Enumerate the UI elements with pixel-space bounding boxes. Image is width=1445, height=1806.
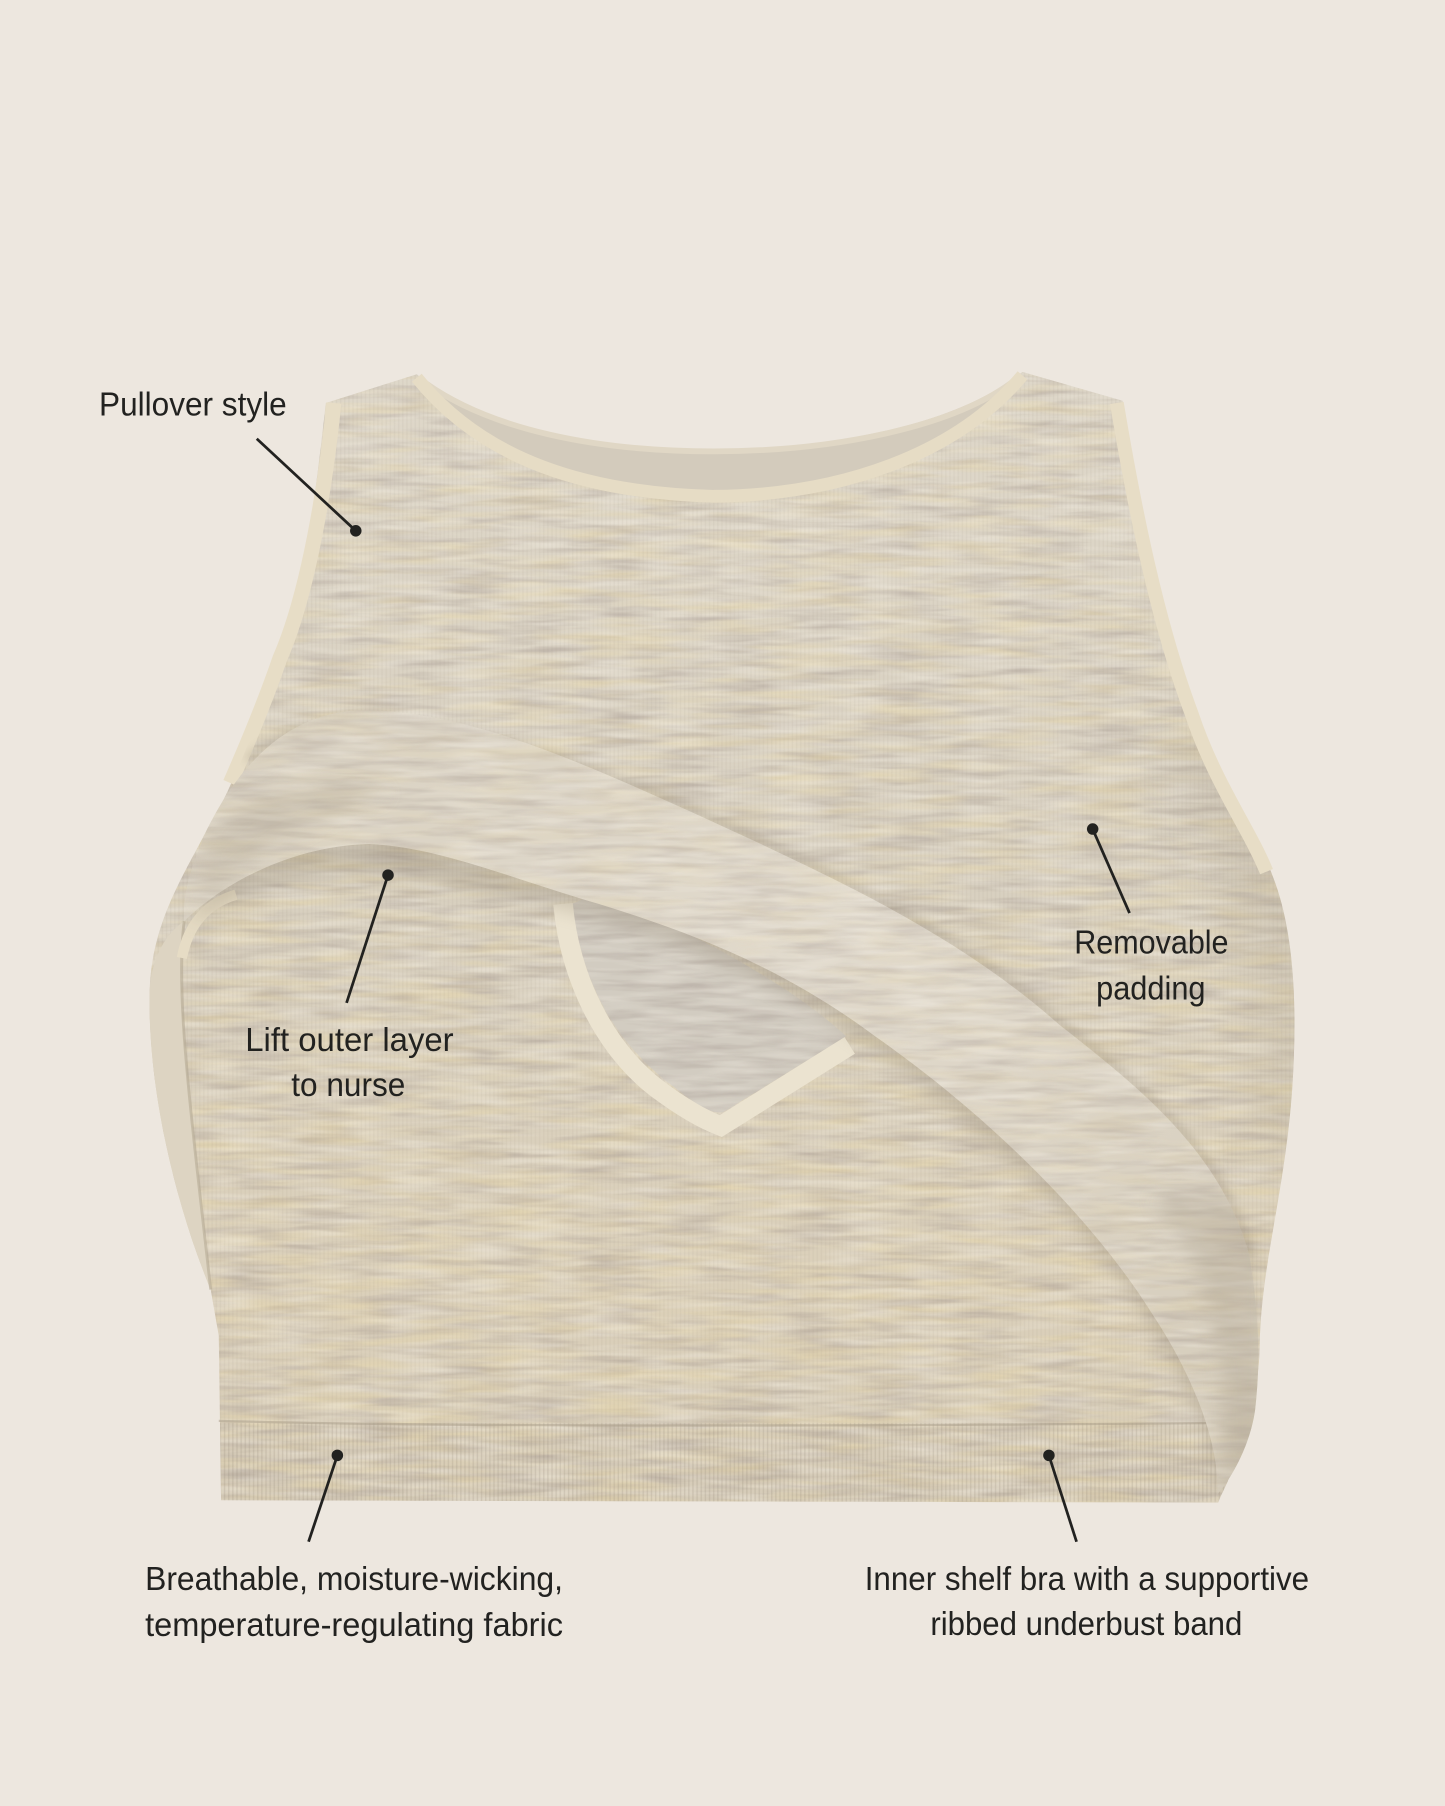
callout: breathable fabric: temperature-regulating fabric bbox=[145, 1607, 563, 1644]
callout: inner shelf bra: Inner shelf bra with a supportive bbox=[865, 1561, 1309, 1598]
callout: breathable fabric: Breathable, moisture-wicking, bbox=[145, 1561, 563, 1598]
back neck binding bbox=[421, 378, 1018, 451]
underbust seam bbox=[219, 1421, 1209, 1425]
garment illustration bbox=[115, 345, 1336, 1520]
callout: lift outer layer: Lift outer layer bbox=[245, 1022, 454, 1059]
left wrapped side bbox=[150, 895, 236, 1290]
callout: removable padding bbox=[1074, 823, 1229, 1007]
flap shadow above bbox=[248, 724, 1249, 1253]
left armhole binding bbox=[230, 403, 334, 783]
garment body bbox=[115, 345, 1336, 1520]
lifted outer flap bbox=[173, 691, 1278, 1508]
callout: inner shelf bra: ribbed underbust band bbox=[930, 1606, 1242, 1643]
callout: lift outer layer bbox=[245, 869, 454, 1104]
callout: removable padding: Removable bbox=[1074, 924, 1229, 961]
callout: inner shelf bra bbox=[865, 1450, 1309, 1643]
callout: lift outer layer: to nurse bbox=[291, 1067, 405, 1104]
callout: removable padding: padding bbox=[1096, 970, 1206, 1007]
right armhole binding bbox=[1117, 403, 1267, 872]
callout: breathable fabric bbox=[145, 1450, 563, 1644]
callout: pullover style bbox=[99, 387, 362, 537]
nursing opening bbox=[554, 902, 855, 1137]
callout: pullover style: Pullover style bbox=[99, 387, 287, 424]
neckline binding bbox=[417, 375, 1022, 496]
flap shadow below bbox=[190, 806, 1255, 1503]
inner back neck bbox=[417, 374, 1022, 495]
